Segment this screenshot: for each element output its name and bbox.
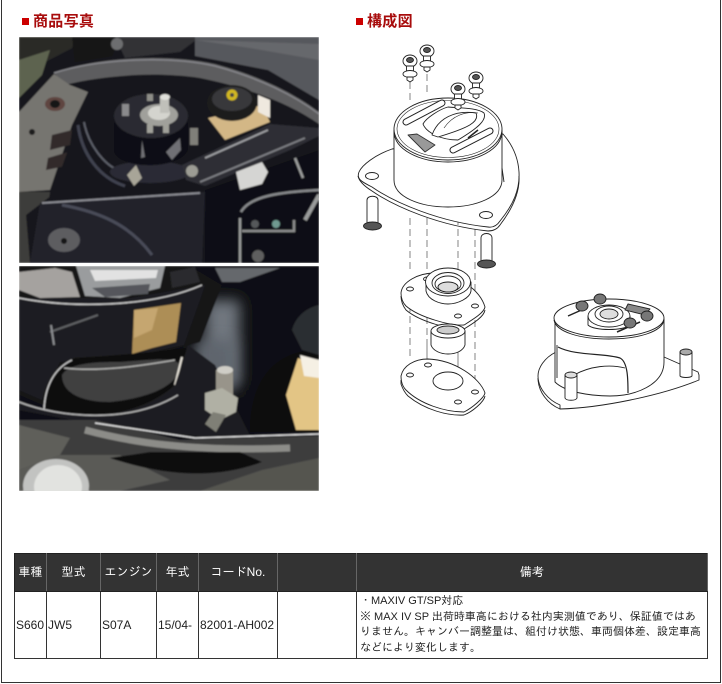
table data row bbox=[16, 595, 701, 654]
tower bbox=[26, 151, 206, 262]
table header row: エンジン bbox=[104, 565, 152, 579]
flange plate bbox=[358, 134, 519, 231]
heading: product photos: 商品写真 bbox=[33, 13, 94, 30]
bearing bbox=[431, 324, 465, 354]
illustrations bbox=[19, 37, 700, 491]
cutout bbox=[42, 348, 187, 414]
table data row: ・MAXIV GT/SP対応 bbox=[360, 595, 463, 607]
table header row: 車種 bbox=[18, 565, 42, 579]
lower plate bbox=[401, 359, 485, 415]
mount body bbox=[114, 122, 188, 166]
logo plate bbox=[408, 134, 435, 152]
table data row: 82001-AH002 bbox=[200, 618, 274, 632]
table header row: 年式 bbox=[166, 565, 190, 579]
diagram: assembled strut mount bbox=[538, 294, 699, 409]
photo: strut mount installed in engine bay bbox=[19, 37, 319, 263]
centre opening bbox=[423, 107, 485, 140]
table header row bbox=[15, 554, 707, 654]
photo: close-up of mount and bolt bbox=[19, 266, 319, 513]
engine bay parts bbox=[205, 150, 319, 263]
table data row: 15/04- bbox=[158, 618, 192, 632]
table data row: ※ MAX IV SP 出荷時車高における社内実測値であり、保証値ではありません。キャンバー調整量は、組付け状態、車両個体差、設定車高などにより変化します。 bbox=[360, 610, 701, 654]
lower brace bbox=[19, 420, 319, 491]
reservoir bbox=[292, 305, 319, 355]
diagram: exploded view of strut mount bbox=[358, 45, 699, 415]
adjustment slots bbox=[406, 103, 442, 122]
table header row: コードNo. bbox=[211, 565, 265, 579]
table data row: JW5 bbox=[48, 618, 72, 632]
stud pins bbox=[364, 196, 496, 268]
reservoir bbox=[208, 105, 270, 140]
mount upper bbox=[19, 266, 222, 405]
flange bbox=[19, 345, 250, 436]
table data row: S07A bbox=[102, 618, 131, 632]
dashed assembly lines bbox=[410, 74, 475, 400]
middle plate with collar bbox=[401, 268, 485, 329]
table data row: S660 bbox=[16, 618, 44, 632]
bolt bbox=[216, 370, 233, 396]
specification table bbox=[14, 553, 708, 659]
heading: configuration diagram: 構成図 bbox=[367, 13, 413, 30]
table header row: 備考 bbox=[520, 565, 544, 579]
upper cylinder bbox=[394, 98, 504, 207]
brace bbox=[182, 124, 319, 186]
table header row: 型式 bbox=[62, 565, 86, 579]
hex bolts bbox=[403, 45, 483, 110]
